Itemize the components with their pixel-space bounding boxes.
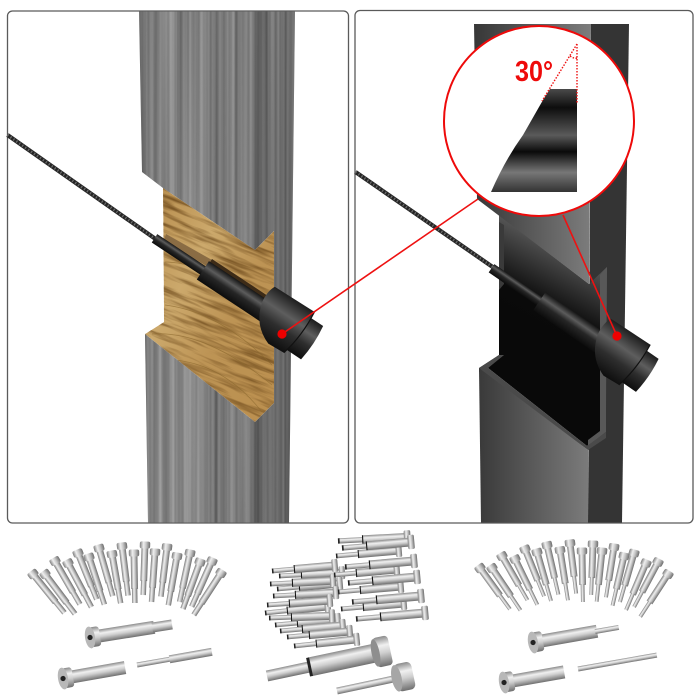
opening left edge — [479, 222, 504, 368]
product group: middle stacked tubes left — [264, 559, 360, 652]
opening right edge — [588, 267, 607, 446]
cable — [8, 135, 157, 240]
dotted angle lines — [542, 44, 578, 103]
lower front rim — [479, 355, 606, 450]
upper front face — [474, 24, 591, 284]
wood post grey faces — [139, 11, 295, 523]
post opening interior — [488, 215, 607, 446]
product group: left fan of studs — [27, 541, 227, 618]
product: right threaded rod — [578, 653, 657, 671]
lower front face — [479, 368, 588, 522]
metal post side face — [588, 24, 629, 522]
exposed wood notch — [145, 188, 274, 422]
slot shadow — [164, 234, 268, 310]
product: left threaded rod — [136, 648, 213, 669]
product: left large stud — [83, 614, 174, 649]
product: left stud body — [56, 657, 127, 690]
product group: middle stacked tubes right — [333, 530, 429, 626]
red leader lines and markers — [277, 199, 622, 341]
panel: metal post with angle callout — [355, 10, 693, 523]
product: right stud body — [497, 661, 566, 694]
angle label: 30° — [515, 56, 553, 88]
fitting — [477, 246, 664, 397]
cable — [356, 172, 497, 270]
callout: 30 degree magnifier — [444, 26, 634, 216]
product: middle small tube — [334, 661, 416, 700]
wedge profile — [491, 89, 577, 192]
product: right large stud — [526, 617, 621, 654]
fitting with red marker — [141, 216, 328, 364]
product group: right fan of studs — [474, 539, 674, 620]
panel: wood post with fitting — [6, 10, 350, 524]
product: middle large tube — [264, 635, 393, 691]
